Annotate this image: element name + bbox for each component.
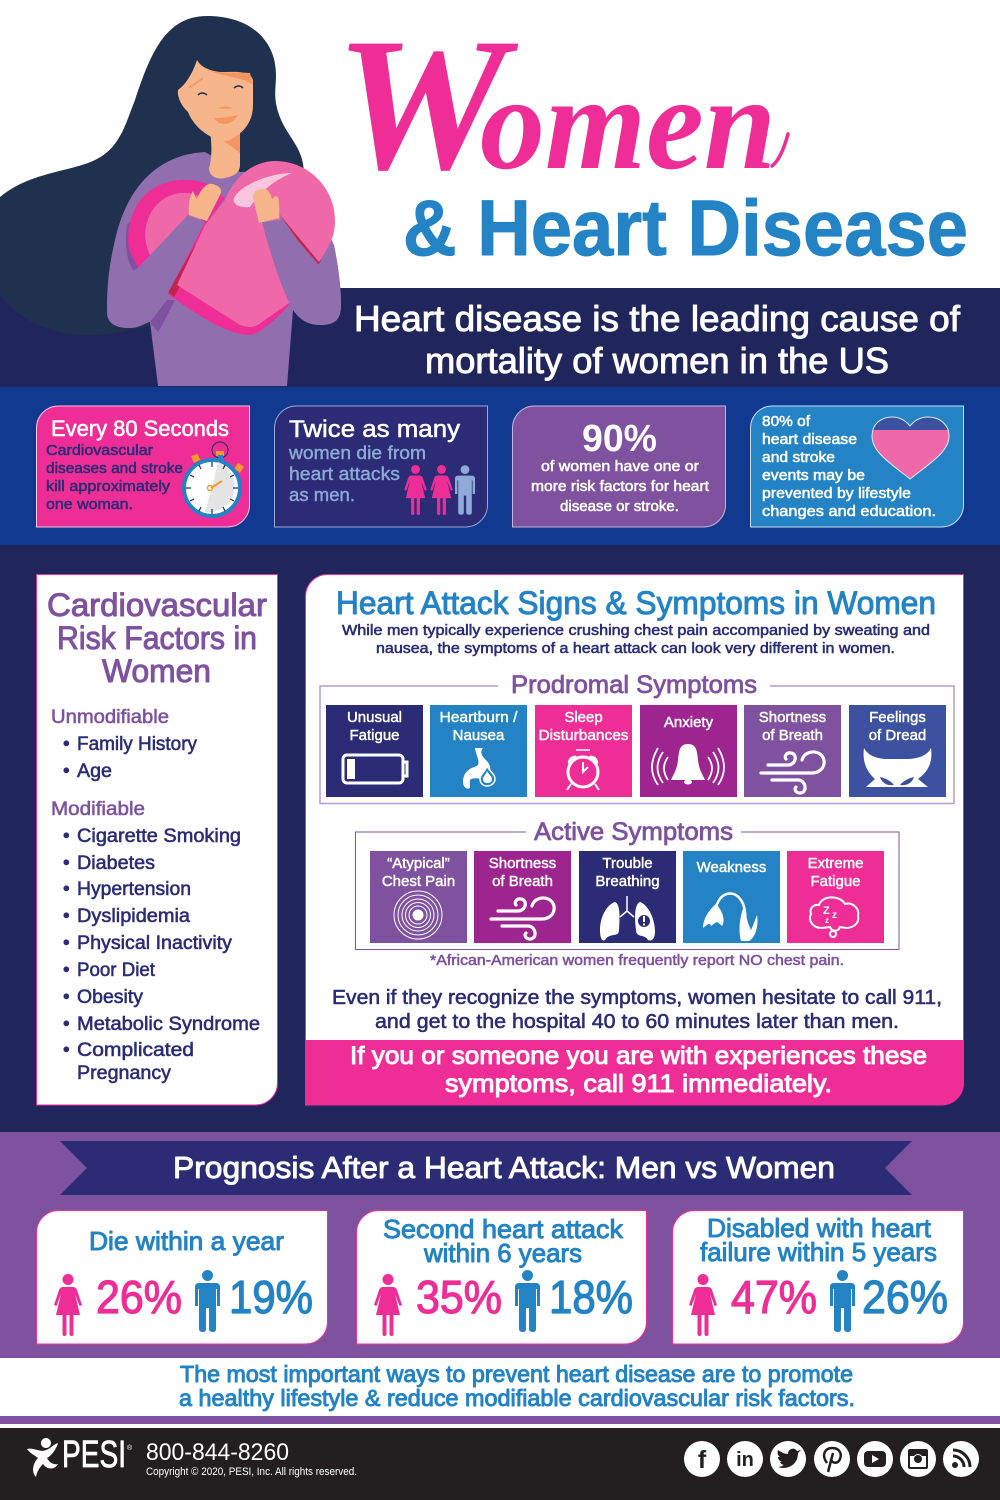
- icon: twitter: [770, 1441, 806, 1477]
- call to action strip: [305, 1040, 964, 1105]
- symptoms intro: nausea, the symptoms of a heart attack can look very different in women.: [376, 640, 895, 657]
- tile: shortness of breath: [744, 705, 841, 797]
- tile: heartburn / nausea: Heartburn /: [440, 709, 518, 726]
- icon: two women and one man: [404, 465, 475, 515]
- tile: unusual fatigue: Unusual: [347, 709, 402, 726]
- card 1 body text: diseases and stroke: [46, 460, 183, 477]
- icon: two-tone heart: [870, 415, 952, 481]
- modifiable list: •: [63, 853, 70, 874]
- card 3 body text: [531, 458, 710, 515]
- tile: sleep disturbances: Disturbances: [538, 727, 628, 744]
- card 3 body text: of women have one or: [541, 458, 699, 475]
- tile: unusual fatigue: Fatigue: [349, 727, 400, 744]
- prognosis card: die within a year: Die within a year: [89, 1226, 284, 1256]
- title: & Heart Disease: & Heart Disease: [403, 183, 968, 272]
- figures and percentages: 26%: [96, 1271, 182, 1323]
- modifiable list: •: [63, 933, 70, 954]
- footer: PESI logo and contact: PESI: [62, 1434, 126, 1476]
- modifiable list: Dyslipidemia: [77, 906, 190, 927]
- tile: trouble breathing: Trouble: [602, 855, 653, 872]
- headline banner text: [354, 298, 961, 381]
- modifiable list: •: [63, 987, 70, 1008]
- modifiable list: Pregnancy: [77, 1063, 172, 1084]
- modifiable list: Metabolic Syndrome: [77, 1014, 260, 1035]
- icon: linkedin: [727, 1441, 763, 1477]
- modifiable list: Cigarette Smoking: [77, 826, 241, 847]
- tile: sleep disturbances: [535, 705, 632, 797]
- closing statement: [179, 1361, 855, 1411]
- tile: extreme fatigue: Fatigue: [810, 873, 861, 890]
- modifiable list: Physical Inactivity: [77, 933, 233, 954]
- card 1 body text: one woman.: [46, 496, 133, 513]
- figures and percentages: [374, 1270, 633, 1336]
- modifiable list: Modifiable: [51, 799, 145, 820]
- group: active symptoms: [356, 818, 899, 950]
- risk factors heading: Risk Factors in: [57, 620, 257, 656]
- tile: anxiety: [640, 705, 737, 797]
- call to action strip: If you or someone you are with experiences these: [350, 1042, 927, 1070]
- stat card: every 80 seconds: Every 80 Seconds: [51, 416, 229, 441]
- icon: linkedin: in: [736, 1449, 754, 1471]
- modifiable list: Complicated: [77, 1040, 194, 1061]
- panel: heart attack signs and symptoms: [305, 574, 964, 1105]
- tile: shortness of breath: of Breath: [492, 873, 553, 890]
- figures and percentages: 18%: [549, 1271, 633, 1323]
- figures and percentages: [689, 1270, 948, 1336]
- stat card: 90%: 90%: [582, 418, 657, 460]
- tile: shortness of breath: [474, 851, 571, 943]
- icon: facebook: [684, 1441, 720, 1477]
- footer: PESI logo and contact: Copyright © 2020, PESI, Inc. All rights reserved.: [146, 1466, 357, 1478]
- unmodifiable list: •: [63, 761, 70, 782]
- card 4 body text: changes and education.: [762, 503, 936, 520]
- modifiable list: •: [63, 1040, 70, 1061]
- tile: heartburn / nausea: [430, 705, 527, 797]
- modifiable list: Poor Diet: [77, 960, 156, 981]
- prognosis card: second heart attack: [356, 1210, 646, 1344]
- tile: anxiety: Anxiety: [664, 714, 714, 731]
- tile: weakness: Weakness: [697, 859, 766, 876]
- risk factors heading: Cardiovascular: [47, 587, 267, 623]
- tile: extreme fatigue: z: [825, 916, 829, 925]
- figures and percentages: 47%: [731, 1271, 817, 1323]
- prognosis card: second heart attack: within 6 years: [423, 1238, 582, 1268]
- card 4 body text: 80% of: [762, 413, 811, 430]
- modifiable list: Diabetes: [77, 853, 155, 874]
- card 4 body text: and stroke: [762, 449, 835, 466]
- banner: prognosis heading: [60, 1141, 912, 1195]
- card 4 body text: prevented by lifestyle: [762, 485, 911, 502]
- tile: trouble breathing: Breathing: [595, 873, 660, 890]
- prognosis card: die within a year: [36, 1210, 328, 1344]
- social media icons: [684, 1441, 979, 1477]
- card 1 body text: [46, 442, 183, 513]
- modifiable list: •: [63, 960, 70, 981]
- tile: feelings of dread: [849, 705, 946, 797]
- hesitation statement: Even if they recognize the symptoms, women hesitate to call 911,: [332, 987, 942, 1009]
- footer: PESI logo and contact: ®: [127, 1444, 133, 1452]
- symptoms intro: While men typically experience crushing chest pain accompanied by sweating and: [342, 622, 930, 639]
- stat card: twice as many: Twice as many: [289, 416, 460, 443]
- card 2 body text: as men.: [289, 485, 355, 505]
- tile: shortness of breath: Shortness: [759, 709, 826, 726]
- icon: instagram: [900, 1441, 936, 1477]
- icon: rss: [943, 1441, 979, 1477]
- footnote: *African-American women frequently report NO chest pain.: [430, 952, 844, 969]
- tile: shortness of breath: Shortness: [489, 855, 556, 872]
- risk factors heading: Women: [102, 653, 211, 689]
- icon: facebook: f: [698, 1446, 707, 1474]
- tile: heartburn / nausea: Nausea: [453, 727, 505, 744]
- figures and percentages: [54, 1270, 313, 1336]
- unmodifiable list: Unmodifiable: [51, 707, 169, 728]
- footer: PESI logo and contact: [27, 1434, 357, 1478]
- tile: sleep disturbances: Sleep: [564, 709, 603, 726]
- stat card: 90%: [512, 406, 726, 527]
- modifiable list: [51, 799, 260, 1084]
- card 3 body text: more risk factors for heart: [531, 478, 710, 495]
- banner: prognosis heading: Prognosis After a Heart Attack: Men vs Women: [173, 1150, 835, 1185]
- modifiable list: •: [63, 1014, 70, 1035]
- figures and percentages: 35%: [416, 1271, 502, 1323]
- tile: atypical chest pain: [370, 851, 467, 943]
- call to action strip: symptoms, call 911 immediately.: [445, 1070, 832, 1098]
- risk factors heading: [47, 587, 267, 689]
- icon: youtube: [857, 1441, 893, 1477]
- symptoms intro: [342, 622, 930, 657]
- footer: PESI logo and contact: 800-844-8260: [146, 1439, 289, 1466]
- group: prodromal symptoms: [320, 671, 954, 804]
- tile: unusual fatigue: [326, 705, 423, 797]
- modifiable list: Obesity: [77, 987, 144, 1008]
- tile: extreme fatigue: Extreme: [808, 855, 863, 872]
- stat card: twice as many: [274, 406, 488, 527]
- unmodifiable list: •: [63, 734, 70, 755]
- tile: feelings of dread: of Dread: [869, 727, 926, 744]
- card 4 body text: events may be: [762, 467, 865, 484]
- figures and percentages: 19%: [229, 1271, 313, 1323]
- prognosis card: disabled with heart failure: failure within 5 years: [700, 1237, 937, 1267]
- tile: trouble breathing: [579, 851, 676, 943]
- modifiable list: •: [63, 826, 70, 847]
- card 3 body text: disease or stroke.: [560, 498, 679, 515]
- modifiable list: •: [63, 906, 70, 927]
- unmodifiable list: Family History: [77, 734, 197, 755]
- tile: atypical chest pain: Chest Pain: [382, 873, 455, 890]
- stat card: every 80 seconds: [36, 406, 250, 527]
- tile: extreme fatigue: Z: [823, 905, 830, 917]
- card 4 body text: [762, 413, 936, 520]
- tile: feelings of dread: Feelings: [869, 709, 926, 726]
- tile: extreme fatigue: [787, 851, 884, 943]
- icon: stopwatch: [184, 442, 244, 516]
- hesitation statement: [332, 987, 942, 1033]
- icon: pinterest: [814, 1441, 850, 1477]
- card 2 body text: [288, 443, 426, 505]
- unmodifiable list: Age: [77, 761, 112, 782]
- modifiable list: •: [63, 879, 70, 900]
- card 1 body text: Cardiovascular: [46, 442, 153, 459]
- panel: cardiovascular risk factors: [36, 574, 278, 1105]
- headline banner text: Heart disease is the leading cause of: [354, 298, 961, 339]
- closing statement: a healthy lifestyle & reduce modifiable cardiovascular risk factors.: [179, 1385, 855, 1411]
- tile: shortness of breath: of Breath: [762, 727, 823, 744]
- card 4 body text: heart disease: [762, 431, 857, 448]
- illustration: woman holding a heart: [0, 16, 341, 386]
- prognosis card: second heart attack: Second heart attack: [383, 1214, 624, 1244]
- title: Women: omen: [480, 49, 776, 197]
- symptoms heading: Heart Attack Signs & Symptoms in Women: [336, 585, 936, 621]
- prognosis card: disabled with heart failure: [672, 1210, 964, 1344]
- tile: atypical chest pain: “Atypical”: [387, 855, 450, 872]
- prognosis card: disabled with heart failure: Disabled with heart: [707, 1213, 932, 1243]
- figures and percentages: 26%: [862, 1271, 948, 1323]
- card 1 body text: kill approximately: [46, 478, 171, 495]
- icon: PESI figure: [27, 1438, 58, 1477]
- group: prodromal symptoms: Prodromal Symptoms: [511, 671, 757, 699]
- headline banner text: mortality of women in the US: [425, 340, 889, 381]
- hesitation statement: and get to the hospital 40 to 60 minutes later than men.: [375, 1011, 899, 1033]
- card 2 body text: heart attacks: [289, 464, 400, 484]
- group: active symptoms: Active Symptoms: [534, 818, 733, 846]
- tile: weakness: [683, 851, 780, 943]
- closing statement: The most important ways to prevent heart disease are to promote: [180, 1361, 853, 1387]
- unmodifiable list: [51, 707, 197, 782]
- modifiable list: Hypertension: [77, 879, 191, 900]
- title: Women: W: [335, 0, 519, 210]
- tile: extreme fatigue: z: [832, 910, 837, 921]
- title: Women: [335, 0, 788, 210]
- card 2 body text: women die from: [288, 443, 426, 463]
- stat card: 80%: [750, 406, 964, 527]
